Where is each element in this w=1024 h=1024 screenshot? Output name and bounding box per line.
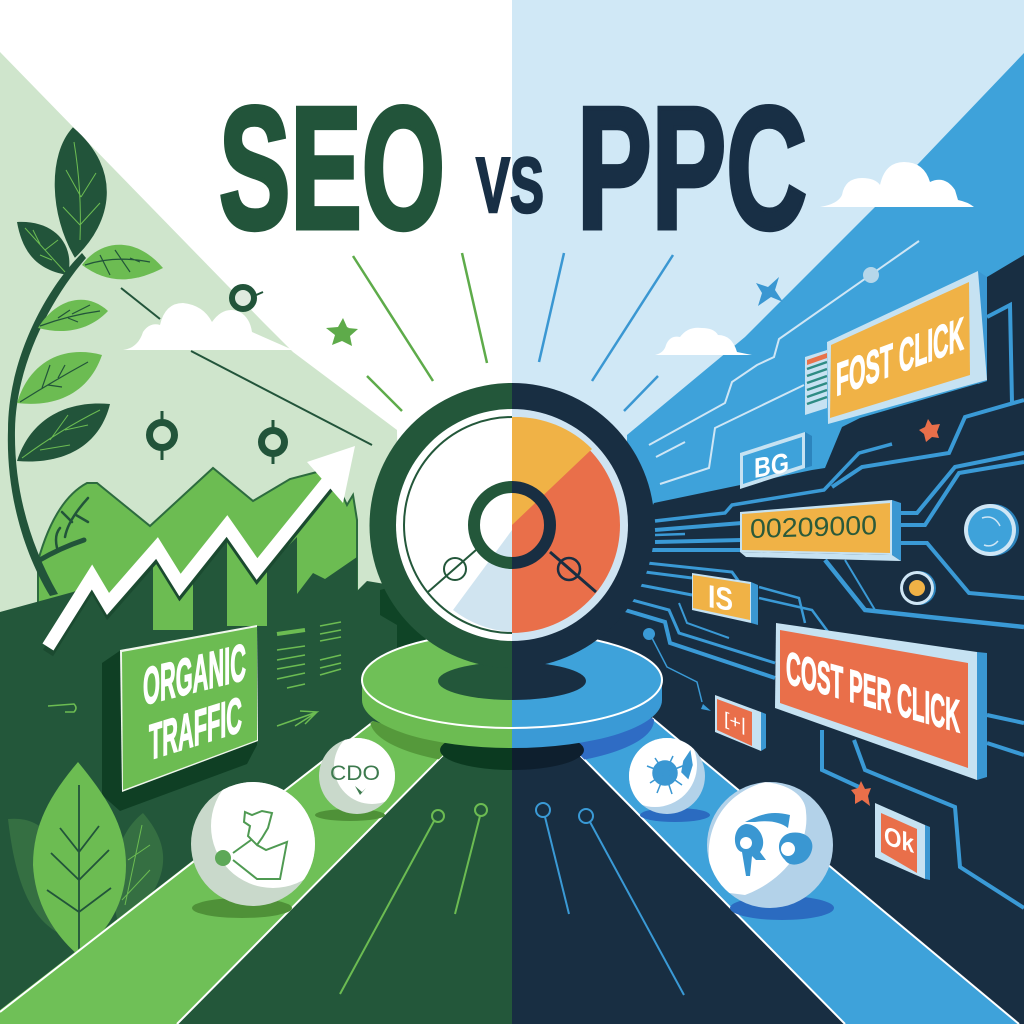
main leaf [33, 762, 126, 955]
PPC dark ground [512, 255, 1024, 1024]
blue slope lines [649, 241, 919, 484]
gauge outer ring left [370, 383, 512, 668]
virus shape [647, 752, 692, 794]
ball: key blobs icon [707, 782, 834, 920]
lower green leaf [17, 352, 102, 404]
gauge wedge pale blue [453, 530, 512, 632]
growth arrow [48, 446, 355, 653]
sign: small bracket tag [715, 695, 766, 751]
chart column 1 [153, 556, 193, 630]
infographic canvas: ORGANIC [143, 633, 246, 717]
title [219, 70, 807, 265]
gauge yellow slice [512, 417, 592, 525]
background: SEO sky [0, 0, 512, 1024]
striped data panel [805, 350, 827, 415]
green mountain chart [38, 462, 357, 610]
blob shapes [735, 813, 812, 876]
sign: cost per click [775, 623, 987, 780]
small blob [355, 786, 366, 795]
background: SEO light green slope [0, 52, 400, 640]
platform underside shading [370, 718, 654, 770]
title word: SEO: SEO [219, 70, 445, 265]
gauge red slice [512, 417, 620, 633]
right green leaf [82, 245, 163, 279]
sign: number counter [740, 500, 901, 561]
blue road [570, 718, 1019, 1024]
twig in mountain [38, 498, 88, 561]
shadow behind gauge [380, 586, 440, 655]
top dark leaf [55, 128, 106, 257]
person line art [233, 811, 287, 879]
dark connector lines [121, 288, 372, 445]
icon: red star lower [851, 781, 871, 806]
sign: organic traffic [102, 625, 258, 811]
icon: blue star [756, 277, 783, 306]
lowest dark leaf [17, 403, 110, 462]
icon: ring marker right [262, 420, 284, 464]
sign label: counter digits: 00209000 [750, 510, 877, 544]
icon: green star [326, 318, 358, 346]
middle green leaf [38, 300, 108, 331]
circuit node with pin [643, 628, 711, 711]
icon: plant [8, 128, 163, 596]
icon: white cloud left [123, 303, 293, 350]
background: PPC sky [512, 0, 1024, 1024]
green road [0, 721, 453, 1024]
needle right [550, 552, 596, 592]
plant stem [8, 253, 86, 596]
sign label: BG: BG [754, 446, 789, 484]
gauge [370, 383, 654, 668]
pin lines: green [340, 804, 487, 994]
gauge face left [396, 409, 512, 641]
ball: person icon [191, 782, 315, 918]
gauge thin arc [404, 417, 512, 633]
icon: white cloud upper right [820, 162, 974, 207]
platform shadow: center [440, 742, 512, 770]
icon: ring marker top [232, 287, 263, 309]
background: PPC blue slope [627, 53, 1024, 520]
ball: virus icon [629, 738, 710, 822]
platform [362, 632, 662, 748]
gauge rim right [512, 409, 628, 641]
small data lines [277, 622, 341, 688]
back leaf left [8, 819, 70, 938]
ball: CDO [315, 738, 395, 821]
platform side [362, 700, 512, 748]
sign: fost click [827, 271, 987, 424]
left dark leaf [17, 222, 69, 275]
arrow: small right [277, 711, 317, 726]
icon: white cloud lower [655, 328, 752, 355]
ball label: CDO: CDO [330, 762, 380, 785]
SEO dark ground [0, 534, 512, 1024]
slider knob [863, 267, 879, 283]
sign: BG [740, 432, 812, 489]
gauge outer ring right [512, 383, 654, 668]
icon: red star upper [919, 419, 940, 442]
leaf group bottom left [8, 762, 163, 955]
sign: small OK tag [875, 803, 930, 880]
sign: organic traffic: TRAFFIC [149, 686, 242, 771]
pin lines: blue [536, 803, 684, 995]
tag label: Ok [884, 821, 914, 859]
title word: PPC: PPC [577, 70, 807, 265]
chart column 2 [227, 536, 267, 626]
sign label: IS: IS [708, 578, 733, 618]
back leaf right [113, 813, 163, 930]
PPC circuit lines [625, 305, 1024, 908]
icon: blue coin [964, 504, 1019, 556]
center hub [474, 487, 512, 563]
sign: IS [692, 573, 758, 625]
icon: ring marker left [150, 411, 174, 460]
icon: yellow node [900, 571, 936, 605]
tag label: [+| [724, 707, 746, 736]
rays: green [353, 253, 487, 411]
platform top [361, 640, 512, 729]
rays: blue [539, 253, 673, 411]
arrow: small left [48, 704, 76, 712]
platform hole [438, 664, 512, 700]
needle left [428, 550, 476, 592]
title word: VS: VS [476, 141, 544, 229]
